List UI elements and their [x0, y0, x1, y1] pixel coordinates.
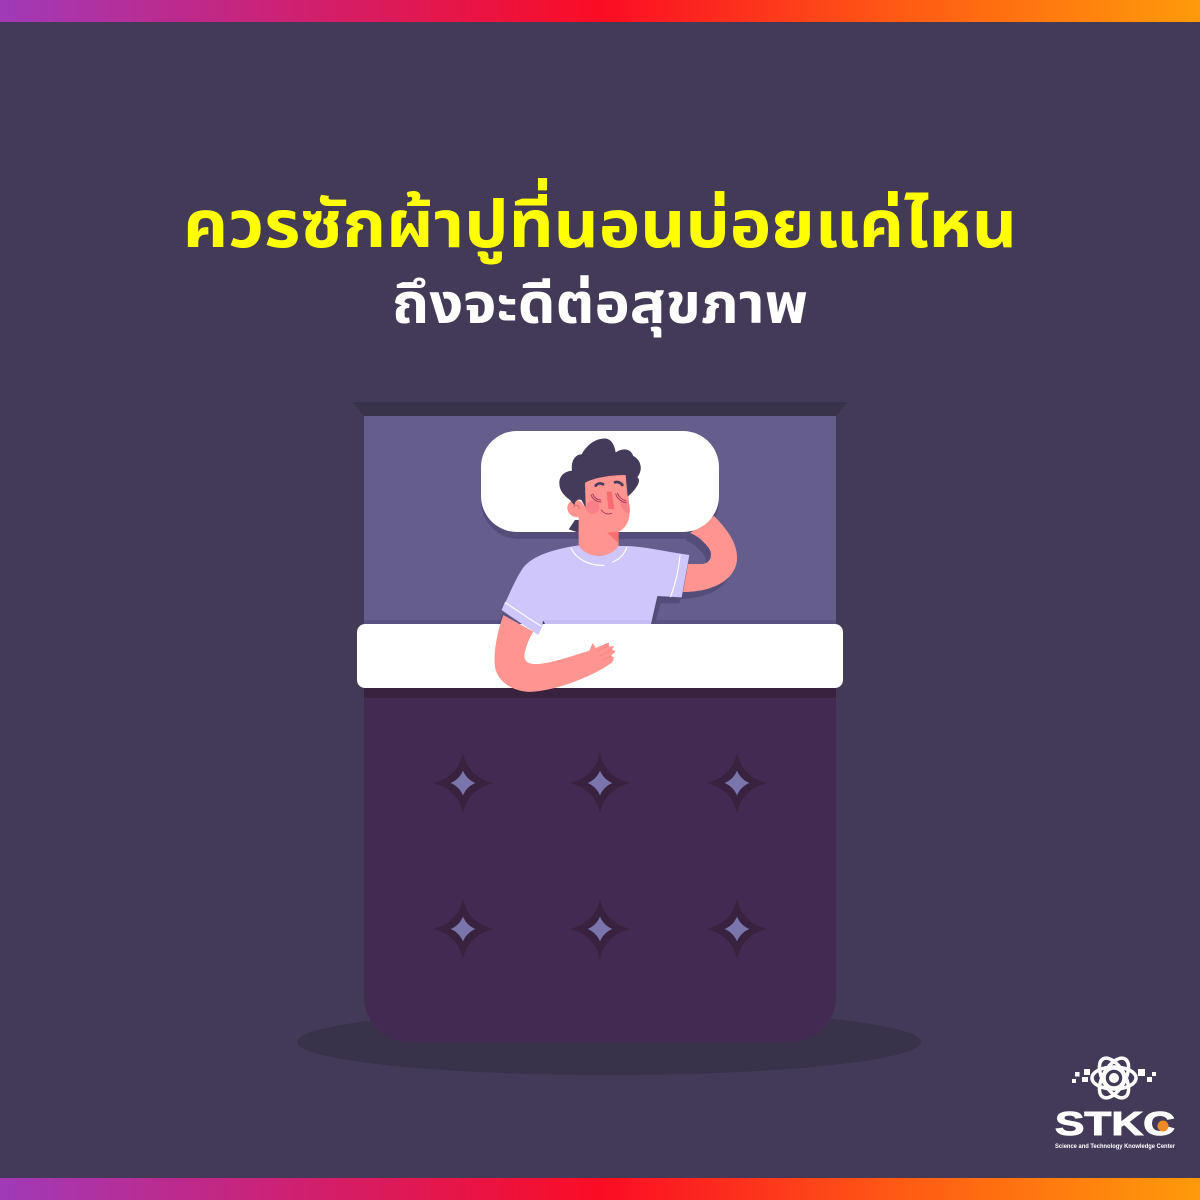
man upper body — [498, 439, 689, 635]
shirt trims — [571, 548, 680, 597]
headboard — [352, 402, 848, 416]
duvet star 5 — [570, 899, 630, 959]
duvet star 4 — [433, 899, 493, 959]
logo atom icon — [1092, 1053, 1136, 1103]
logo orange dot — [1158, 1120, 1168, 1132]
pillow — [481, 431, 719, 532]
sleeve cuff — [502, 603, 543, 635]
closed eyes and mouth — [591, 493, 626, 514]
floor shadow — [297, 1009, 921, 1075]
duvet star 3 — [707, 753, 767, 813]
top gradient bar — [0, 0, 1200, 22]
logo wordmark: STKC — [1055, 1105, 1175, 1142]
white sheet fold — [357, 624, 843, 688]
ear — [567, 500, 584, 517]
bottom sheet — [364, 416, 836, 696]
logo pixel squares — [1072, 1069, 1156, 1083]
duvet star 2 — [570, 753, 630, 813]
subtitle: ถึงจะดีต่อสุขภาพ — [392, 272, 808, 338]
raised arm — [683, 516, 737, 592]
eyebrows — [596, 482, 622, 486]
raised arm shadow — [678, 523, 732, 599]
illustration: bed and sleeping man — [352, 402, 848, 1042]
shirt — [502, 545, 689, 635]
cheeks — [586, 500, 630, 514]
STKC logo — [1055, 1053, 1176, 1150]
nose — [607, 492, 614, 509]
ear detail — [573, 505, 579, 509]
finger lines — [597, 646, 611, 661]
duvet star 1 — [433, 753, 493, 813]
title: ควรซักผ้าปูที่นอนบ่อยแค่ไหน — [183, 178, 1017, 264]
back hair tuft — [569, 520, 580, 533]
duvet — [364, 680, 836, 1042]
cuff line — [505, 603, 541, 626]
small shirt mark — [542, 621, 545, 624]
logo tagline: Science and Technology Knowledge Center — [1055, 1144, 1176, 1150]
pillow shadow — [481, 438, 719, 539]
shirt hem tint — [543, 620, 651, 624]
hair — [559, 439, 641, 507]
bottom gradient bar — [0, 1178, 1200, 1200]
neck — [579, 527, 619, 556]
blanket shadow line — [364, 620, 836, 626]
man's lower arm — [495, 603, 616, 692]
face — [579, 468, 630, 535]
duvet star 6 — [707, 899, 767, 959]
neck shade — [606, 532, 619, 543]
shirt shadow — [498, 596, 682, 624]
duvet fold shadow — [364, 688, 836, 698]
